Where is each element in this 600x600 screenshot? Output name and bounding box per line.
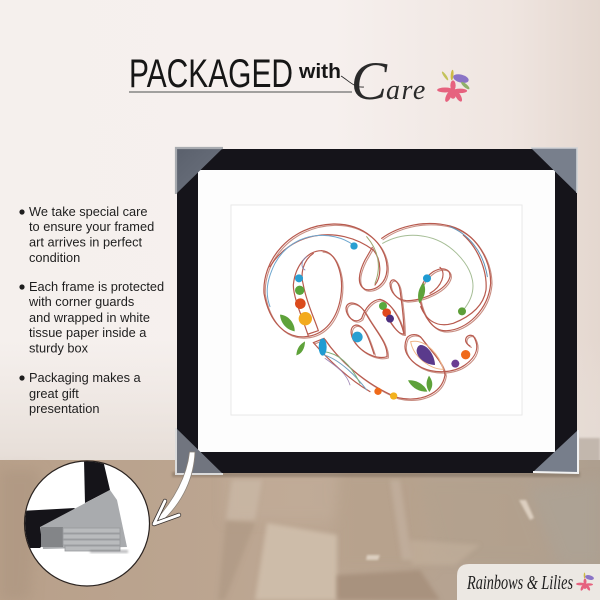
title word: Care: C xyxy=(351,51,387,111)
corner guard: top right xyxy=(531,148,577,193)
corner guard: top left xyxy=(175,148,223,194)
arrow pointing to inset xyxy=(154,452,195,524)
icon: brand flower xyxy=(576,572,594,591)
black frame xyxy=(177,149,577,473)
title word: with: with xyxy=(298,61,341,83)
brand badge: Rainbows & Lilies xyxy=(457,564,600,600)
title: Packaged with Care xyxy=(129,51,470,111)
bullet 3 xyxy=(19,370,142,416)
bullet 1: art arrives in perfect xyxy=(29,234,143,250)
bullet 3: Packaging makes a xyxy=(29,370,142,385)
bullet 2: Each frame is protected xyxy=(29,279,164,294)
bullet 2: with corner guards xyxy=(28,294,134,309)
paper strand outlines, main layer xyxy=(264,223,491,399)
bullet 2: and wrapped in white xyxy=(29,310,150,325)
corner guard: bottom left xyxy=(176,428,223,474)
bullet 2 xyxy=(19,279,164,356)
quilled heart: Love xyxy=(264,223,492,400)
bullet 2: sturdy box xyxy=(29,340,89,356)
bullet 1 xyxy=(19,204,154,265)
coloured strands xyxy=(267,235,353,307)
bullet 1: We take special care xyxy=(29,204,148,219)
bullet 3: great gift xyxy=(29,386,79,401)
bullet 1: condition xyxy=(29,250,80,265)
teardrop outlines xyxy=(411,341,443,369)
title word: PACKAGED: PACKAGED xyxy=(129,52,293,96)
bullet list xyxy=(19,204,164,416)
corner guard: bottom right xyxy=(533,430,578,473)
quilled coils xyxy=(280,242,470,400)
wall background xyxy=(0,0,600,462)
frame shadow xyxy=(172,472,580,477)
bullet 3: presentation xyxy=(29,401,99,416)
title word: Care: are xyxy=(386,75,427,106)
inner art border xyxy=(231,205,522,415)
framed artwork xyxy=(172,148,580,477)
wood floor xyxy=(0,460,600,600)
bullet 1: to ensure your framed xyxy=(29,219,154,234)
light plank xyxy=(255,523,337,600)
white mat xyxy=(198,170,555,452)
dark plank xyxy=(337,570,440,600)
magnified corner guard inset xyxy=(20,460,150,586)
bullet 2: tissue paper inside a xyxy=(29,325,147,340)
leaves xyxy=(280,315,295,331)
paper strand outlines, second layer xyxy=(265,225,492,400)
icon: lily flower xyxy=(437,70,470,103)
